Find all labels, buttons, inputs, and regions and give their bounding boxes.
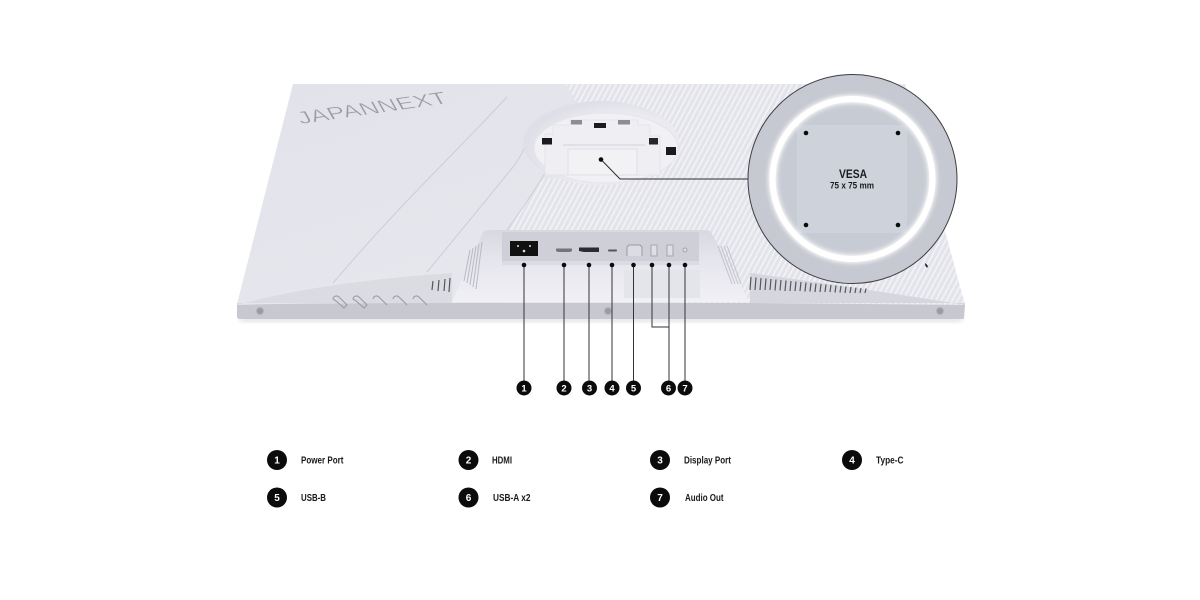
port panel xyxy=(502,232,699,261)
port number badges xyxy=(516,380,692,396)
legend item: HDMI: 2 xyxy=(466,456,472,466)
VESA leader line xyxy=(599,157,748,179)
legend item: USB-A: 6 xyxy=(466,493,472,504)
port number badges: 3 xyxy=(587,384,592,394)
port number badges: 5 xyxy=(631,384,637,394)
mount clips xyxy=(571,120,582,124)
port leader lines xyxy=(522,263,687,381)
right vents xyxy=(750,277,866,293)
ribbed stripes xyxy=(565,84,965,305)
VESA size: 75 x 75 mm xyxy=(830,180,874,192)
HDMI port xyxy=(556,248,572,252)
monitor shadow xyxy=(240,316,962,322)
mount recess xyxy=(534,113,678,183)
left vents xyxy=(432,278,450,292)
legend item: audio out xyxy=(650,488,724,508)
legend item: display port: 3 xyxy=(657,456,663,466)
USB-C port xyxy=(608,250,617,252)
VESA holes xyxy=(804,131,900,227)
recess side vents xyxy=(464,242,482,289)
small black mark xyxy=(925,263,928,268)
legend item: display port xyxy=(650,450,732,470)
legend item: power port xyxy=(267,450,344,470)
mount inner bracket xyxy=(568,149,637,175)
seam lines xyxy=(333,97,545,283)
power port xyxy=(510,241,538,256)
port number badges: 6 xyxy=(666,384,671,394)
DisplayPort port xyxy=(579,248,599,252)
bottom band xyxy=(237,303,965,319)
legend item: USB-B xyxy=(267,488,326,508)
VESA label: VESA xyxy=(839,167,867,181)
inner disc xyxy=(772,99,932,259)
VESA magnifier xyxy=(748,74,957,284)
legend item: HDMI xyxy=(458,450,512,470)
legend item: USB-B: USB-B xyxy=(301,493,326,504)
legend item: audio out: Audio Out xyxy=(685,493,724,504)
bottom lip xyxy=(237,273,452,305)
legend item: display port: Display Port xyxy=(684,456,732,466)
port number badges: 1 xyxy=(521,384,527,394)
JAPANNEXT logo: JAPANNEXT xyxy=(292,88,452,128)
legend item: HDMI: HDMI xyxy=(492,456,512,466)
power port pins xyxy=(517,245,531,252)
legend item: type-c xyxy=(842,450,904,470)
legend item: USB-A: USB-A x2 xyxy=(493,493,531,504)
port number badges: 7 xyxy=(682,384,688,394)
screws xyxy=(256,308,944,314)
legend item: audio out: 7 xyxy=(657,493,663,504)
mount ring xyxy=(523,101,679,185)
legend item: power port: 1 xyxy=(274,456,280,466)
recess xyxy=(452,230,750,302)
port number badges: 2 xyxy=(561,384,567,394)
port number badges: 4 xyxy=(609,384,615,394)
USB-B port xyxy=(627,245,642,256)
magnifier disc xyxy=(748,74,957,284)
legend item: type-c: 4 xyxy=(849,456,855,466)
control buttons xyxy=(333,296,427,308)
legend item: power port: Power Port xyxy=(301,456,344,466)
audio port xyxy=(683,248,687,252)
USB-A ports xyxy=(651,245,657,256)
monitor back xyxy=(237,84,965,322)
legend xyxy=(267,450,904,508)
glow ring xyxy=(772,99,932,259)
legend item: USB-A xyxy=(458,488,531,508)
monitor body xyxy=(237,84,965,319)
legend item: type-c: Type-C xyxy=(876,456,904,466)
lower recess panel xyxy=(624,270,700,298)
mount square xyxy=(797,125,907,233)
white ring xyxy=(772,99,932,259)
mount plate xyxy=(545,120,660,175)
legend item: USB-B: 5 xyxy=(274,493,280,504)
